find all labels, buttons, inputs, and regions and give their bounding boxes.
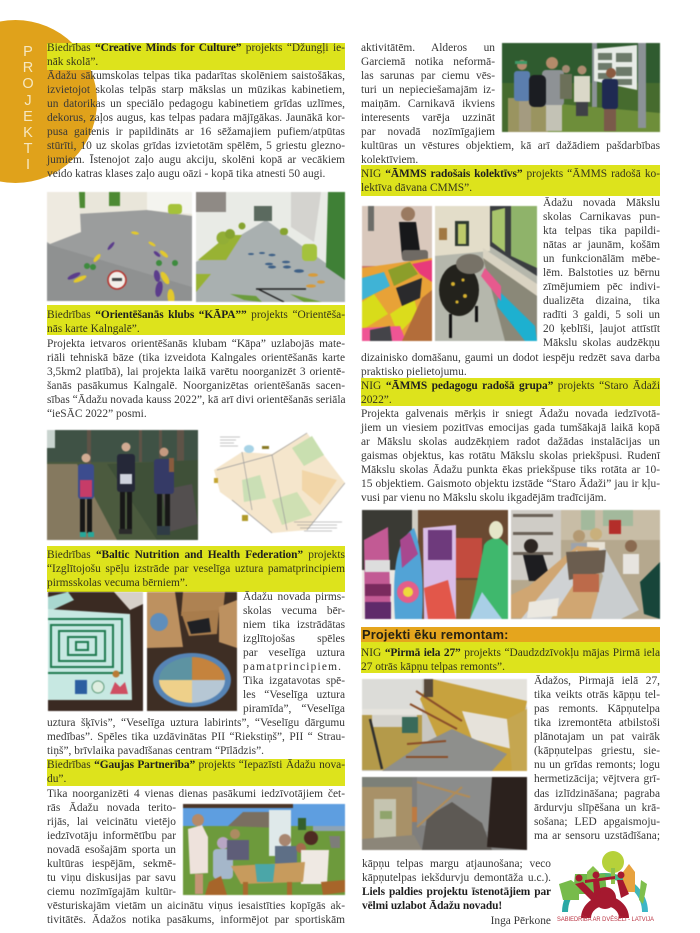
- text block: Staro Ādaži description: Projekta galvenais mērķis ir sniegt Ādažu novada iedzīvotā-: [361, 408, 660, 420]
- vertical section label: PROJEKTI: P: [23, 44, 33, 60]
- heading: Gaujas Partnerība: Biedrības “Gaujas Partnerība” projekts “Iepazīsti Ādažu nova-: [47, 759, 345, 771]
- text block: Staro Ādaži description: jiem un viesiem pozitīvas emocijas gada tumšākajā laikā kopā: [361, 422, 660, 434]
- vertical section label: PROJEKTI: E: [23, 109, 33, 125]
- text block: stairwell renovation, beside photos: tika izremontēta atbilstoši: [534, 717, 660, 729]
- heading: Gaujas Partnerība: [47, 759, 345, 786]
- section bar: Projekti ēku remontam: [361, 627, 660, 642]
- heading: Gaujas Partnerība: du”.: [47, 773, 66, 785]
- text block: Staro Ādaži description: ar Mākslu skolas audzēkņiem radot dažādas instalācijas un: [361, 436, 660, 448]
- text block: KĀPA description: sības “Ādažu novada kauss 2022”, kā arī divi orientēšanās seriāla: [47, 394, 346, 406]
- text block: stairwell renovation, beside photos: hermetizācija; vējtvera grī-: [534, 773, 660, 785]
- text block: Baltic Nutrition description, wrapped beside photos: par veselīga uztura: [243, 647, 345, 659]
- photo: school corridor: [195, 191, 346, 303]
- heading: Pirmā iela 27: 27 otrās kāpņu telpas remonts”.: [361, 661, 505, 673]
- text block: KĀPA description: [47, 338, 346, 420]
- text block: Staro Ādaži description: 15 objektiem. Gaismoto objektu izstāde “Staro Ādaži” jau ir kļu-: [361, 478, 660, 490]
- logo red figures: [575, 872, 629, 918]
- author name: Inga Pērkone: [491, 915, 551, 927]
- text block: column two, full width lines: kolektīviem.: [361, 154, 418, 166]
- text block: Creative Minds description: stūrīti, 10 uz skolas grīdas izvietotām spēlēm, 5 griestu glezno-: [47, 140, 345, 152]
- text block: Staro Ādaži description: [360, 408, 660, 504]
- text block: Baltic Nutrition description, wrapped beside photos: skolas vecuma bēr-: [243, 605, 345, 617]
- text block: art school furniture, beside photos: Ādažu novada Mākslu: [543, 197, 660, 209]
- text block: stairwell renovation, closing lines: [362, 858, 551, 912]
- text block: Baltic Nutrition description, wrapped beside photos: pamatprincipiem.: [243, 661, 342, 673]
- text block: column two continuation, beside photo: Garciemā notika neformā-: [361, 56, 495, 68]
- vertical section label: PROJEKTI: K: [23, 125, 33, 141]
- heading: Creative Minds for Culture: nāk skolā”.: [47, 56, 98, 68]
- text block: art school furniture, full width: dizainisko domāšanu, gaumi un dodot iespēju redzēt sava darba: [361, 352, 660, 364]
- text block: KĀPA description: šanās pasākumus Kalngalē. Noorganizētas orientēšanās sacen-: [47, 380, 345, 392]
- text block: Gaujas wrapped beside photo: novadā esošajām sporta un: [47, 844, 176, 856]
- photo: three orienteers in forest: [46, 429, 199, 541]
- heading: Baltic Nutrition and Health Federation: “Izglītojošu spēļu izstrāde par veselīga uztura pamatprincipiem: [47, 563, 345, 575]
- text block: stairwell renovation, beside photos: plānotajam un pat vairāk: [534, 731, 660, 743]
- text block: Gaujas wrapped beside photo: iedzīvotāju informētību par: [47, 830, 176, 842]
- text block: column two continuation, beside photo: interesents varēja uzzināt: [361, 112, 495, 124]
- text block: art school furniture, beside photos: 20 ķeblīši, ļaujot attīstīt: [543, 323, 660, 335]
- text block: Creative Minds description: izvietojot skolas telpās starp mākslas un mūzikas kabinetiem,: [47, 84, 345, 96]
- heading: Pirmā iela 27: [361, 642, 660, 673]
- text block: art school furniture, beside photos: radīti 3 galdi, 5 soli un: [543, 309, 660, 321]
- text block: Gaujas wrapped beside photo: [47, 802, 176, 898]
- text block: Baltic Nutrition description, wrapped beside photos: Ādažu novada pirms-: [243, 591, 345, 603]
- heading: Baltic Nutrition and Health Federation: [47, 546, 345, 592]
- text block: Baltic Nutrition description, full width: medības”. Spēles tika uzdāvinātas PII “Riekstiņš”, PII “ Strau-: [47, 731, 345, 743]
- text block: column two continuation, beside photo: aktivitātēm. Alderos un: [361, 42, 495, 54]
- text block: stairwell renovation, closing lines: vēlmi uzlabot Ādažu novadu!: [362, 900, 502, 912]
- heading: Orientēšanās klubs KĀPA: [47, 305, 345, 335]
- text block: stairwell renovation, beside photos: das izlīdzināšana; pagraba: [534, 788, 660, 800]
- heading: ĀMMS pedagogu radošā grupa: [361, 378, 660, 406]
- text block: Creative Minds description: un datorikas un speciālo pedagogu kabinetiem grīdas uzlīmes,: [47, 98, 345, 110]
- text block: stairwell renovation, beside photos: pas remonts. Kāpņutelpa: [534, 703, 660, 715]
- photo: stairwell before renovation: [361, 678, 528, 772]
- logo: Sabiedrība ar dvēseli Latvija: [557, 851, 654, 923]
- text block: Creative Minds description: Ādažu sākumskolas telpas tika padarītas skolēniem saistošākas,: [47, 70, 345, 82]
- text block: art school furniture, beside photos: Mākslu skolas audzēkņu: [543, 337, 660, 349]
- text block: Gaujas final lines: [47, 900, 345, 926]
- text block: stairwell renovation, beside photos: sošana; LED apgaismoju-: [534, 816, 660, 828]
- vertical section label: PROJEKTI: O: [22, 76, 34, 92]
- text block: Baltic Nutrition description, wrapped beside photos: [243, 591, 345, 715]
- text block: Baltic Nutrition description, full width: tiņš”, brīvlaika pavadīšanas centram “Pīlādzis”.: [47, 745, 264, 757]
- heading: ĀMMS radošais kolektīvs: lektīva dāvana CMMS”.: [361, 182, 472, 194]
- text block: Creative Minds description: veido katras klases zaļo augu oāzi - kopā tika atnesti 50 augi.: [47, 168, 325, 180]
- text block: stairwell renovation, closing lines: Liels paldies projektu īstenotājiem par: [362, 886, 551, 898]
- text block: Baltic Nutrition description, wrapped beside photos: les “Veselīga uztura: [243, 689, 345, 701]
- text block: Baltic Nutrition description, wrapped beside photos: izglītojošas spēles: [243, 633, 345, 645]
- heading: Creative Minds for Culture: Biedrības “Creative Minds for Culture” projekts “Džungļi ie-: [47, 42, 345, 54]
- photo: patterned painted light objects: [361, 509, 509, 620]
- text block: art school furniture, beside photos: skolas Carnikavas pun-: [543, 211, 660, 223]
- text block: Creative Minds description: dekorus, zaļos augus, kas telpas padara mājīgākas. Jaunākā kor-: [47, 112, 345, 124]
- text block: Gaujas wrapped beside photo: kultūras iespējām, sekmē-: [47, 858, 176, 870]
- text block: Baltic Nutrition description, wrapped beside photos: piramīda”, “Veselīga: [243, 703, 345, 715]
- heading: Baltic Nutrition and Health Federation: Biedrības “Baltic Nutrition and Health Federation” projekts: [47, 549, 345, 561]
- text block: Gaujas wrapped beside photo: tu viņu diskusijas par savu: [47, 872, 176, 884]
- text block: Gaujas wrapped beside photo: rijās, lai veicinātu vietējo: [47, 816, 176, 828]
- text block: stairwell renovation, closing lines: kāpņutelpas iekšdurvju demontāža u.c.).: [362, 872, 551, 884]
- text block: stairwell renovation, beside photos: nu un grīdas remonts; logu: [534, 759, 660, 771]
- text block: stairwell renovation, beside photos: ma ar sensoru uzstādīšana;: [534, 830, 660, 842]
- vertical section label: PROJEKTI: J: [24, 93, 32, 109]
- photo: hallway floor with footprints: [46, 191, 193, 302]
- text block: Gaujas wrapped beside photo: rās Ādažu novada terito-: [47, 802, 176, 814]
- text block: Baltic Nutrition description, full width: [47, 717, 345, 757]
- text block: Gaujas final lines: vēsturiskajām vietām un aicinātu viņus iesaistīties kopīgās ak-: [47, 900, 345, 912]
- text block: Baltic Nutrition description, full width: uztura šķīvis”, “Veselīga uztura labirints”, “Veselīgu dārgumu: [47, 717, 345, 729]
- text block: stairwell renovation, beside photos: [534, 675, 660, 842]
- vertical section label: PROJEKTI: T: [24, 141, 32, 157]
- text block: Creative Minds description: jumiem. Īstenojot zaļo augu akciju, skolēni kopā ar vecākiem: [47, 154, 345, 166]
- vertical section label: PROJEKTI: [22, 44, 34, 173]
- text block: art school furniture, full width: [361, 352, 660, 378]
- text block: art school furniture, beside photos: dualizēta dizaina, tika: [543, 295, 660, 307]
- photo: teachers working around table: [510, 510, 661, 620]
- heading: Orientēšanās klubs KĀPA: Biedrības “Orientēšanās klubs “KĀPA”” projekts “Orientēša-: [47, 309, 345, 321]
- text block: art school furniture, beside photos: [543, 197, 660, 349]
- text block: KĀPA description: “ieSĀC 2022” posmi.: [47, 408, 147, 420]
- text block: column two continuation, beside photo: maiņām. Carnikavā ikviens: [361, 98, 495, 110]
- vertical section label: PROJEKTI: I: [26, 157, 30, 173]
- text block: art school furniture, beside photos: zīmējumiem pēc indivi-: [543, 281, 660, 293]
- text block: art school furniture, beside photos: kta telpas tika papildi-: [543, 225, 660, 237]
- text block: stairwell renovation, beside photos: (kāpņutelpas griestu, sie-: [534, 745, 660, 757]
- text block: Staro Ādaži description: gaismas objektus, kas rotātu Mākslu skolas priekšpusi. Rudenī: [361, 450, 660, 462]
- heading: Baltic Nutrition and Health Federation: pirmsskolas vecuma bērniem”.: [47, 577, 188, 589]
- text block: stairwell renovation, beside photos: Ādažos, Pirmajā ielā 27,: [534, 675, 660, 687]
- text block: Gaujas wrapped beside photo: ciemu nozīmīgajām kultūr-: [47, 886, 176, 898]
- text block: Baltic Nutrition description, wrapped beside photos: niem tika izstrādātas: [243, 619, 345, 631]
- vertical section label: PROJEKTI: R: [23, 60, 33, 76]
- text block: art school furniture, beside photos: nātas ar jaunām, košām: [543, 239, 660, 251]
- decorative orange circle: [0, 20, 97, 183]
- photo: man with colourful painted stools: [361, 205, 433, 342]
- heading: Orientēšanās klubs KĀPA: nās karte Kalngalē”.: [47, 323, 140, 335]
- photo: families at picnic table: [182, 803, 346, 896]
- text block: Gaujas first line: Tika noorganizēti 4 vienas dienas pasākumi iedzīvotājiem čet-: [47, 788, 345, 800]
- section bar: Projekti ēku remontam: Projekti ēku remontam:: [362, 627, 509, 642]
- photo: food plate game and boxes: [146, 591, 238, 712]
- text block: art school furniture, beside photos: un funkcionālām mēbe-: [543, 253, 660, 265]
- heading: Creative Minds for Culture: [47, 43, 345, 70]
- text block: Creative Minds description: [46, 70, 345, 180]
- orienteering map: [213, 432, 346, 534]
- text block: KĀPA description: 3,5km2 platībā), lai projekta laikā varētu noorganizēt 3 orientē-: [47, 366, 345, 378]
- photo: stairwell after renovation: [361, 776, 528, 851]
- heading: ĀMMS radošais kolektīvs: NIG “ĀMMS radošais kolektīvs” projekts “ĀMMS radošā ko-: [361, 168, 660, 180]
- text block: Staro Ādaži description: vusi par vienu no Mākslu skolu ikgadējām tradīcijām.: [361, 492, 606, 504]
- text block: stairwell renovation, beside photos: ārdurvju slīpēšana un krā-: [534, 802, 660, 814]
- text block: art school furniture, full width: praktisko pielietojumu.: [361, 366, 467, 378]
- text block: column two continuation, beside photo: turi un nepieciešamajām iz-: [361, 84, 495, 96]
- text block: stairwell renovation, closing lines: kāpņu telpas margu atjaunošana; veco: [362, 858, 551, 870]
- photo: maze game board: [47, 591, 144, 712]
- heading: ĀMMS pedagogu radošā grupa: 2022”.: [361, 394, 392, 406]
- text block: KĀPA description: Projekta ietvaros orientēšanās klubam “Kāpa” uzlabojās mate-: [47, 338, 345, 350]
- text block: column two continuation, beside photo: [361, 42, 495, 138]
- logo rainbow arc and skyline: [559, 851, 647, 912]
- text block: KĀPA description: riāli tehniskā bāze (tika izveidota Kalngales orientēšanās karte: [47, 352, 345, 364]
- text block: column two, full width lines: [361, 140, 660, 166]
- text block: Gaujas final lines: tivitātēs. Ādažos notika pasākums, informējot par sportiskām: [47, 914, 345, 926]
- text block: column two continuation, beside photo: las sarunas par ciemu vēs-: [361, 70, 495, 82]
- text block: Baltic Nutrition description, wrapped beside photos: Tika izgatavotas spē-: [243, 675, 345, 687]
- text block: art school furniture, beside photos: lēm. Balstoties uz bērnu: [543, 267, 660, 279]
- heading: ĀMMS pedagogu radošā grupa: NIG “ĀMMS pedagogu radošā grupa” projekts “Staro Ādaži: [361, 380, 660, 392]
- heading: ĀMMS radošais kolektīvs: [361, 165, 660, 196]
- photo: colourful tables and benches by window: [434, 205, 538, 342]
- text block: column two continuation, beside photo: par novadā nozīmīgajiem: [361, 126, 495, 138]
- text block: stairwell renovation, beside photos: tika veikts otrās kāpņu tel-: [534, 689, 660, 701]
- photo: people at information board: [501, 42, 661, 133]
- text block: Creative Minds description: pusa gaitenis ir papildināts ar 16 sēžamajiem pufiem/atpūtas: [47, 126, 345, 138]
- heading: Pirmā iela 27: NIG “Pirmā iela 27” projekts “Daudzdzīvokļu mājas Pirmā iela: [361, 647, 660, 659]
- text block: Staro Ādaži description: Mākslu skolas Ādažu punkta ēkas priekšpuse tiks rotāta ar 10-: [361, 464, 660, 476]
- text block: column two, full width lines: kultūras un vēstures objektiem, kā arī dažādiem pašdarbības: [361, 140, 660, 152]
